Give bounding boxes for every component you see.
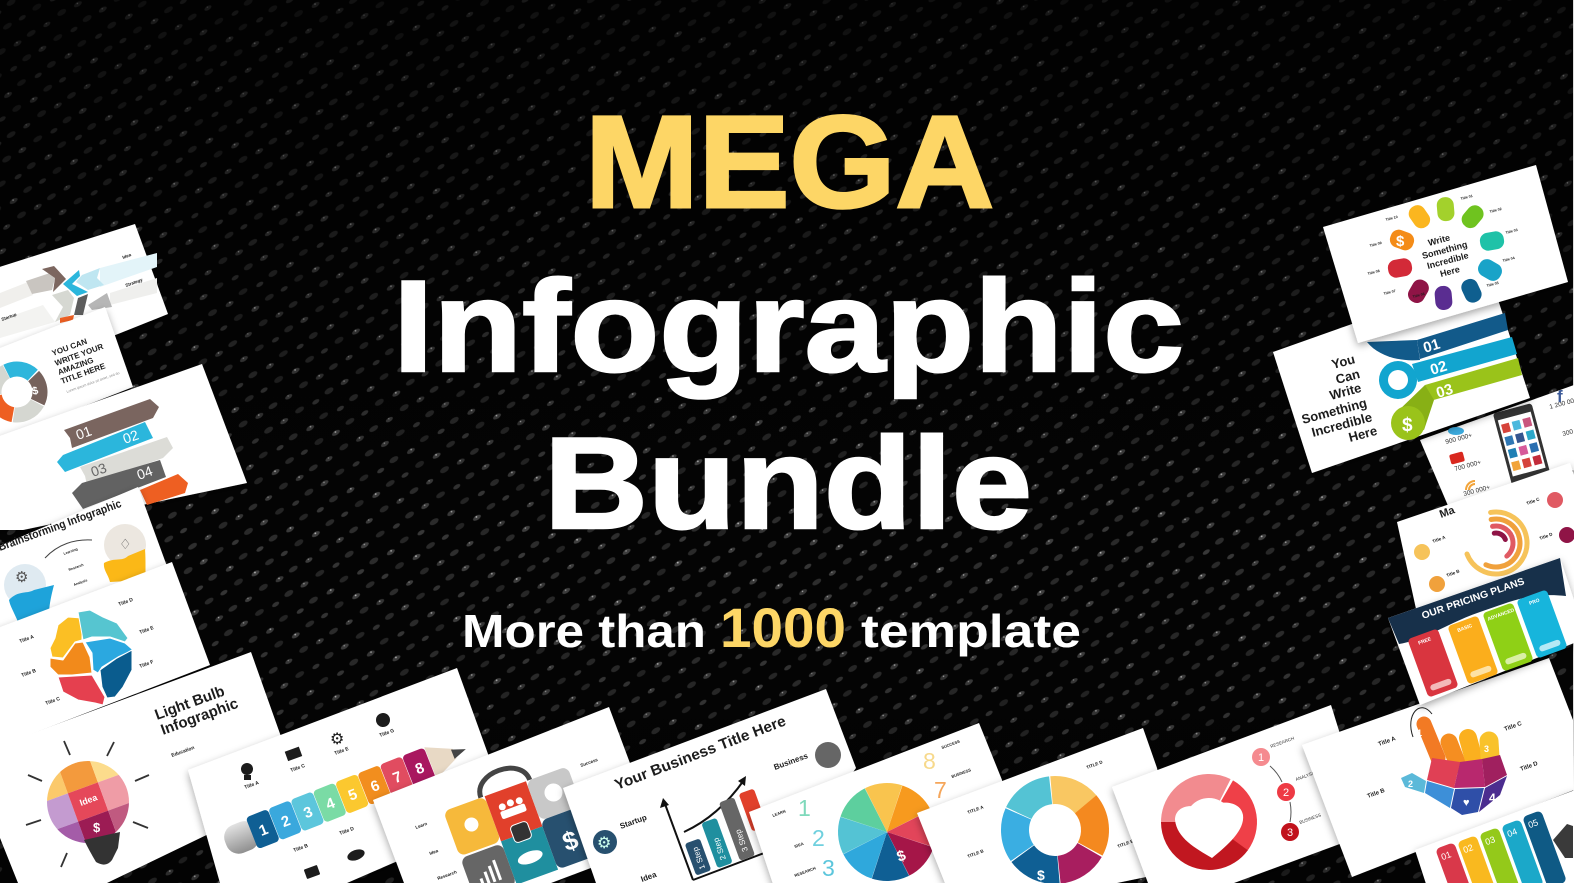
number 02: 02	[121, 426, 141, 447]
rays	[26, 741, 149, 867]
card: FREE	[1407, 628, 1459, 698]
center heading: Write	[1427, 232, 1451, 248]
heading: Light Bulb Infographic: Infographic	[159, 695, 240, 739]
legend labels	[1432, 496, 1554, 578]
panel: numbered ribbons	[0, 364, 247, 530]
node 3: 3	[1287, 827, 1293, 839]
wheel icon: dollar: $	[895, 847, 909, 866]
number 03: 03	[89, 459, 109, 480]
brain labels: Title C	[45, 696, 61, 707]
pie wheel	[854, 799, 920, 865]
node labels	[1270, 736, 1322, 825]
brain labels: Title B	[21, 668, 37, 679]
ring labels: TITLE E	[1117, 839, 1134, 849]
title: Infographic: Infographic	[393, 253, 1184, 399]
node 2: 2	[1283, 787, 1289, 799]
panel: radial progress chart	[1397, 463, 1574, 650]
icon: blue head: ⚙	[15, 569, 28, 586]
wheel numbers: 3	[822, 855, 835, 881]
cycle labels: Title 03	[1505, 228, 1518, 235]
pencil labels: Title A	[244, 780, 260, 791]
title: Bundle: Bundle	[544, 410, 1032, 556]
panel: pencil infographic	[188, 668, 510, 883]
axis arrows	[660, 776, 746, 808]
briefcase labels: Idea	[429, 848, 439, 856]
stats text: 700 000+	[1454, 459, 1482, 473]
panel: ten step cycle	[1323, 165, 1568, 343]
pencil labels	[244, 728, 395, 854]
brain labels: Title A	[19, 634, 35, 645]
heading: you can write something incredible here	[1300, 351, 1379, 445]
stats text: 900 000+	[1445, 432, 1473, 446]
radial arcs	[1460, 507, 1532, 579]
pencil: 7	[391, 768, 405, 787]
column 01: 01	[1440, 849, 1453, 862]
heading: you can write something incredible here: Something	[1300, 395, 1369, 427]
icons	[241, 713, 390, 879]
arc above finger	[1411, 708, 1432, 737]
legend labels: Title D	[1539, 531, 1554, 541]
column 03	[1479, 827, 1522, 883]
center heading: Here	[1439, 264, 1461, 279]
column 04: 04	[1506, 826, 1519, 839]
panel: briefcase infographic	[373, 707, 640, 883]
bulb puzzle	[47, 761, 129, 843]
column 03: 03	[1484, 834, 1497, 847]
partial heading: Ma	[1438, 504, 1457, 521]
hand	[1401, 724, 1507, 815]
pencil	[220, 733, 472, 859]
subtitle: More than 1000 template	[462, 596, 1081, 659]
briefcase labels: Success	[580, 757, 599, 768]
brain labels: Title E	[139, 625, 155, 636]
ring labels: TITLE D	[1086, 759, 1104, 770]
panel: five columns infographic	[1415, 790, 1574, 883]
idea label: Idea	[78, 792, 100, 808]
heart	[1175, 803, 1243, 858]
node 1	[1252, 748, 1270, 766]
connectors	[1270, 766, 1291, 822]
cycle labels: Title 07	[1383, 289, 1396, 296]
briefcase: $	[558, 824, 583, 857]
subtitle: More than 1000 template: template	[861, 605, 1081, 657]
panel: brainstorming infographic	[0, 487, 172, 650]
label: Startup: Startup	[619, 813, 648, 831]
heading: Your Business Title Here: Your Business Title Here	[612, 713, 788, 794]
subtitle: More than 1000 template: More than	[462, 605, 706, 657]
panel: social stats phone	[1420, 385, 1574, 515]
icon: startup gear	[593, 830, 617, 854]
band 2: 02	[1428, 358, 1449, 379]
icon: yellow head	[104, 524, 146, 582]
icon: youtube	[1449, 451, 1465, 465]
icon: startup gear: ⚙	[597, 835, 611, 852]
label: Business: Business	[773, 751, 810, 772]
panel: octagon ring infographic	[917, 728, 1175, 883]
heading: you can write something incredible here: Incredible	[1310, 409, 1374, 440]
icon: business people	[815, 742, 841, 768]
step labels: Research	[68, 563, 84, 572]
bar: 1 Step: 1 Step	[691, 845, 707, 871]
bar: 2 Step	[701, 818, 733, 868]
pencil labels: Title D	[339, 826, 355, 837]
step labels: Learning	[63, 547, 78, 556]
pencil: 4	[324, 794, 338, 813]
column 02	[1457, 835, 1500, 883]
cycle labels: Title 02	[1489, 207, 1502, 214]
icon: blue head	[4, 564, 54, 622]
legend labels: Title A	[1432, 534, 1447, 544]
stats text: 300 000+	[1463, 484, 1491, 498]
donut chart	[0, 360, 49, 424]
panel: business growth chart	[563, 689, 856, 883]
wheel labels: LEARN	[772, 808, 786, 818]
title: MEGA: MEGA	[585, 88, 994, 235]
heading: you can write your amazing title here: WRITE YOUR	[54, 342, 105, 368]
ring	[1159, 772, 1259, 872]
legend circle: D	[1559, 527, 1574, 543]
heading: Light Bulb Infographic: Light Bulb	[153, 683, 227, 724]
label: Strategy: Strategy	[125, 277, 144, 288]
center heading	[1421, 232, 1470, 279]
hand: ♥	[1463, 797, 1470, 809]
wheel labels: IDEA	[794, 841, 804, 849]
heading: you can write your amazing title here: YOU CAN	[51, 337, 89, 358]
label: Startup: Startup	[1, 312, 17, 322]
legend circle: B	[1429, 576, 1445, 592]
hand labels: Title B	[1367, 788, 1386, 800]
navy banner	[1388, 558, 1566, 644]
bar: 1 Step	[685, 838, 711, 876]
node labels: ANALYSIS	[1295, 770, 1317, 782]
cycle labels	[1367, 194, 1518, 299]
body text: Lorem ipsum dolor sit amet, sed do	[66, 371, 120, 394]
brain labels: Title F	[139, 659, 154, 670]
bar: 3 Step: 3 Step	[733, 828, 750, 853]
band 3: $	[1402, 415, 1413, 436]
ring labels: TITLE A	[967, 804, 985, 815]
brain labels	[19, 597, 155, 707]
ring labels: TITLE B	[967, 848, 985, 859]
column 04	[1501, 819, 1544, 883]
pencil labels: Title B	[293, 843, 309, 854]
briefcase labels: Learn	[415, 821, 428, 830]
heading: you can write something incredible here: Here	[1347, 423, 1379, 445]
ring	[999, 774, 1111, 883]
heading: you can write something incredible here: You	[1330, 351, 1357, 372]
pencil labels: Title E	[334, 746, 350, 757]
label: Education: Education	[171, 745, 195, 759]
cycle labels: Title 08	[1367, 269, 1380, 276]
panel: light bulb infographic	[0, 652, 300, 883]
step labels	[63, 547, 88, 587]
band 3: 03	[1434, 381, 1455, 402]
pencil labels: Title G	[379, 728, 395, 739]
wheel numbers: 8	[923, 748, 936, 774]
node labels: BUSINESS	[1299, 812, 1322, 825]
dollar icon: $	[93, 820, 101, 835]
panel: pricing plans	[1388, 558, 1574, 705]
cycle labels: Title 10	[1385, 215, 1398, 222]
heading: you can write something incredible here: Can	[1334, 366, 1362, 387]
panel: chevron arrows	[0, 224, 168, 385]
heading: you can write your amazing title here	[51, 337, 107, 386]
band 1: 01	[1421, 336, 1442, 357]
hand: 1	[1417, 728, 1422, 738]
pencil: 5	[346, 786, 360, 805]
hand labels: Title D	[1520, 761, 1539, 773]
wheel numbers	[798, 748, 947, 881]
card: PRO: PRO	[1528, 598, 1541, 607]
icon: yellow head: ♢	[119, 536, 132, 552]
wheel labels	[772, 739, 972, 878]
wheel labels: SUCCESS	[941, 739, 961, 750]
subtitle: More than 1000 template: 1000	[720, 596, 846, 659]
column 01	[1435, 842, 1478, 883]
hand: 3	[1484, 744, 1489, 754]
stats text	[1445, 396, 1574, 498]
cycle labels: Title 09	[1369, 241, 1382, 248]
icon: rss	[1466, 481, 1475, 490]
phone	[1493, 403, 1551, 487]
node 1: 1	[1258, 752, 1264, 764]
bar: red	[739, 788, 767, 832]
wheel labels: BUSINESS	[951, 767, 972, 779]
label: Idea: Idea	[122, 252, 132, 260]
ring icon: dollar: $	[1037, 867, 1045, 883]
brain	[50, 610, 133, 705]
number 04: 04	[135, 462, 155, 483]
bulb base	[84, 832, 120, 865]
briefcase labels: Research	[437, 869, 458, 881]
node 3	[1281, 823, 1299, 841]
cycle labels: Title 05	[1486, 281, 1499, 288]
hand labels	[1367, 721, 1539, 800]
legend circle: A	[1414, 544, 1430, 560]
node 2	[1277, 783, 1295, 801]
pencil labels: Title C	[290, 763, 306, 774]
legend labels: Title B	[1446, 568, 1461, 578]
pencil: 8	[413, 759, 427, 778]
cycle labels: Title 01	[1460, 194, 1473, 201]
pencil: 3	[301, 803, 315, 822]
pencil: 6	[368, 777, 382, 796]
panel: heart ring infographic	[1112, 705, 1345, 883]
chart axes	[665, 780, 780, 880]
center heading: Incredible	[1426, 250, 1470, 271]
band 3	[1391, 358, 1522, 440]
hand labels: Title C	[1504, 721, 1523, 733]
card: ADVANCED: ADVANCED	[1487, 607, 1516, 623]
center heading: Something	[1421, 239, 1468, 261]
arrow	[45, 540, 92, 558]
cycle pills: $	[1396, 233, 1405, 250]
wheel numbers: 2	[812, 825, 825, 851]
cycle pills	[1387, 196, 1505, 311]
icon: facebook: f	[1557, 387, 1563, 406]
wheel numbers: 7	[934, 777, 947, 803]
cycle labels: Title 04	[1502, 256, 1515, 263]
donut chart: $	[31, 385, 40, 398]
card: ADVANCED	[1482, 602, 1534, 672]
card: BASIC	[1447, 615, 1499, 685]
panel: hand puzzle infographic	[1302, 658, 1574, 877]
hand: 2	[1408, 779, 1413, 789]
card: BASIC: BASIC	[1457, 623, 1474, 634]
step labels: Analysis	[73, 578, 88, 587]
band 2	[1379, 337, 1517, 399]
panel: you can write something incredible	[1273, 275, 1530, 473]
panel: brain infographic	[0, 562, 210, 750]
card: FREE: FREE	[1418, 636, 1433, 647]
heading: OUR PRICING PLANS: OUR PRICING PLANS	[1420, 576, 1526, 622]
dark hexagon	[1553, 824, 1573, 858]
pencil: 2	[279, 812, 293, 831]
column 02: 02	[1462, 842, 1475, 855]
brain labels: Title D	[118, 597, 134, 608]
heading: you can write your amazing title here: TITLE HERE	[60, 361, 107, 386]
heading: you can write your amazing title here: AMAZING	[57, 356, 95, 377]
heading: you can write something incredible here: Write	[1328, 380, 1363, 403]
ring labels	[967, 759, 1134, 859]
heading: Brainstorming Infographic: Brainstorming Infographic	[0, 498, 124, 554]
legend circle: C	[1547, 492, 1563, 508]
card: PRO	[1516, 589, 1568, 659]
icon: twitter	[1448, 427, 1464, 435]
hand: 4	[1489, 791, 1496, 805]
cycle labels: Title 06	[1412, 292, 1425, 299]
column 05	[1522, 810, 1567, 883]
number 01: 01	[74, 422, 94, 443]
briefcase labels	[415, 757, 599, 881]
wheel labels: RESEARCH	[794, 866, 817, 878]
panel: you can write your amazing title	[0, 307, 133, 443]
column 05: 05	[1527, 817, 1540, 830]
bar: 3 Step	[719, 797, 755, 861]
panel: pie wheel infographic	[749, 723, 1010, 883]
legend labels: Title C	[1526, 496, 1541, 506]
wheel numbers: 1	[798, 795, 811, 821]
band 1	[1367, 313, 1508, 360]
pencil: 1	[257, 821, 271, 840]
bar: 2 Step: 2 Step	[711, 836, 728, 861]
hand labels: Title A	[1378, 736, 1397, 748]
icons: ⚙	[330, 731, 344, 748]
node labels: RESEARCH	[1270, 736, 1295, 749]
briefcase	[437, 748, 599, 883]
